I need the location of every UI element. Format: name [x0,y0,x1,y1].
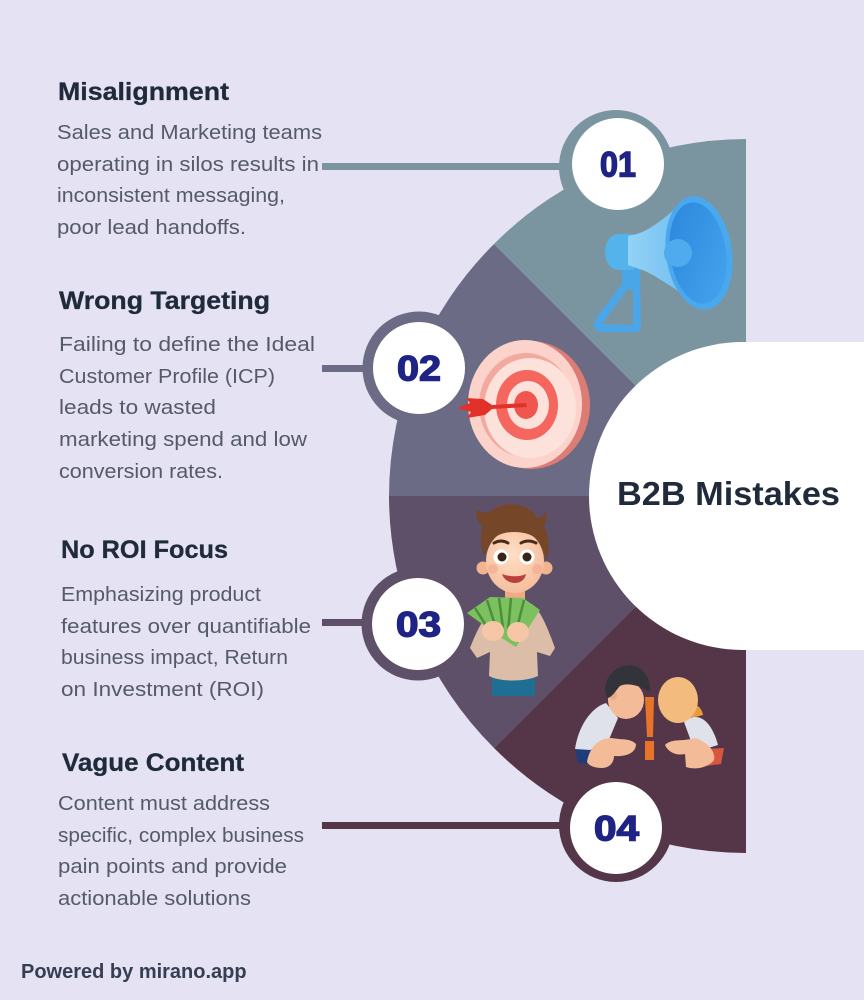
sweater [470,604,555,680]
left child shorts [575,748,597,765]
heading 03: No ROI Focus [61,536,228,564]
eyes [494,550,534,564]
body 03: features over quantifiable [61,616,311,638]
badge 04: 04 [594,810,640,848]
segment 02 [362,244,746,496]
head [486,529,544,593]
body 02: Customer Profile (ICP) [59,366,275,388]
right child shirt [684,717,718,752]
body 03 [61,584,311,701]
body 04: Content must address [58,793,270,815]
badge 01 [572,118,664,210]
right child ponytail [690,705,703,718]
eyebrows [494,541,536,543]
body 01: inconsistent messaging, [57,185,285,207]
badge 03: 03 [396,606,441,644]
ears [476,562,552,574]
badge 01: 01 [600,146,636,184]
segment 03 [362,496,746,748]
text block 01 [57,78,322,239]
text block 02 [59,287,315,483]
left child hair [605,665,650,698]
body 02: conversion rates. [59,461,223,483]
heading 04: Vague Content [62,749,245,777]
body 01: operating in silos results in [57,154,319,176]
body 02: marketing spend and low [59,429,308,451]
body 01: poor lead handoffs. [57,217,246,239]
mouth [502,574,526,583]
right child head [658,677,698,723]
body 02: leads to wasted [59,397,216,419]
exclamation mark [645,697,654,760]
footer credit: Powered by mirano.app [21,961,247,983]
body 03: Emphasizing product [61,584,261,606]
body 01: Sales and Marketing teams [57,122,322,144]
right child legs [665,738,714,768]
body 04: actionable solutions [58,888,251,910]
body 02: Failing to define the Ideal [59,334,315,356]
center title: B2B Mistakes [617,475,840,512]
hands [482,621,529,642]
heading 01: Misalignment [58,78,230,106]
neck [505,585,525,605]
text block 03 [61,536,311,701]
center label panel [589,342,864,650]
body 04 [58,793,304,910]
money fan [467,597,540,647]
icon: boy holding money [467,504,555,696]
icon: megaphone [593,192,740,332]
left child legs [587,738,636,768]
left child face [608,681,644,719]
right child shorts [704,748,724,766]
connector line 03 [322,619,367,626]
hair [476,504,549,560]
body 04: pain points and provide [58,856,287,878]
jeans [492,672,535,696]
icon: two kids with exclamation mark [575,665,724,768]
icon: target with arrow [457,340,590,469]
segment 01 [494,110,746,496]
left child shirt [575,703,618,750]
body 01 [57,122,322,239]
body 02 [59,334,315,483]
segment 04 [494,496,746,882]
text block 04 [58,749,304,910]
body 03: on Investment (ROI) [61,679,264,701]
heading 02: Wrong Targeting [59,287,270,315]
badge 03 [372,578,464,670]
connector line 01 [322,163,564,170]
connector line 02 [322,365,367,372]
body 04: specific, complex business [58,825,304,847]
connector line 04 [322,822,564,829]
badge 02 [373,322,465,414]
body 03: business impact, Return [61,647,288,669]
cheeks [488,564,542,574]
left child ear [609,690,617,700]
badge 04 [570,782,662,874]
badge 02: 02 [397,350,441,388]
